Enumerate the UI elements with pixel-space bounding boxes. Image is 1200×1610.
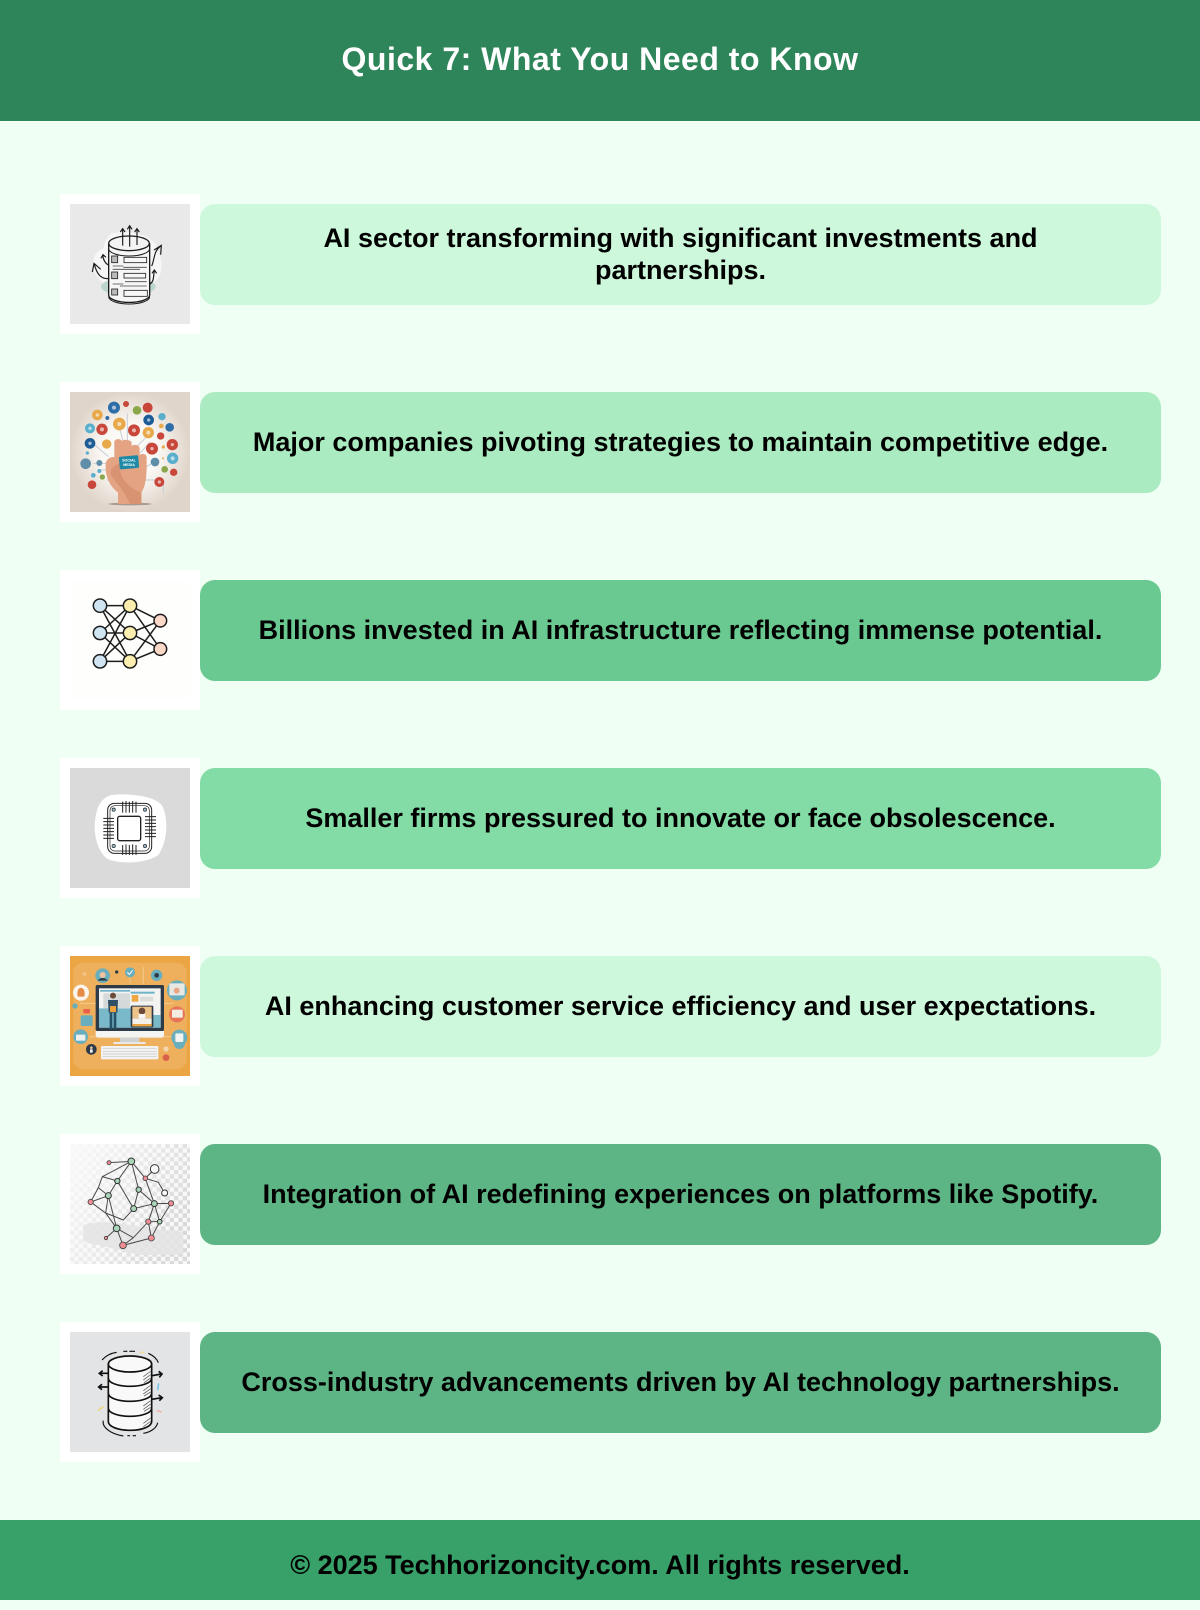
panel: point 3 — [60, 570, 1161, 710]
text card — [200, 768, 1161, 869]
text card: Integration of AI redefining experiences on platforms like Spotify. — [263, 1178, 1098, 1208]
icon: customer service screen — [60, 946, 200, 1086]
panel: point 6 — [60, 1134, 1161, 1274]
footer — [0, 1520, 1200, 1600]
text card: AI enhancing customer service efficiency and user expectations. — [265, 990, 1096, 1020]
text card: AI sector transforming with significant investments and partnerships. — [323, 222, 1038, 284]
text card — [200, 204, 1161, 305]
title: Quick 7: What You Need to Know — [342, 41, 858, 77]
panel: point 4 — [60, 758, 1161, 898]
text card: Smaller firms pressured to innovate or face obsolescence. — [305, 802, 1056, 832]
text card: Cross-industry advancements driven by AI technology partnerships. — [241, 1366, 1120, 1396]
text card — [200, 1144, 1161, 1245]
icon: hand holding social media tag — [60, 382, 200, 522]
text card — [200, 392, 1161, 493]
footer: © 2025 Techhorizoncity.com. All rights reserved. — [290, 1550, 910, 1580]
icon: neural network — [60, 570, 200, 710]
text card — [200, 1332, 1161, 1433]
panel: point 5 — [60, 946, 1161, 1086]
panel: point 1 — [60, 194, 1161, 334]
title — [0, 0, 1200, 121]
icon: database stack with arrows — [60, 1322, 200, 1462]
icon: microchip — [60, 758, 200, 898]
icon: network graph on checkerboard — [60, 1134, 200, 1274]
text card — [200, 580, 1161, 681]
panel: point 7 — [60, 1322, 1161, 1462]
icon: database cylinder with arrows — [60, 194, 200, 334]
icon: hand holding social media tag: SOCIAL — [122, 459, 137, 463]
text card: Billions invested in AI infrastructure reflecting immense potential. — [259, 614, 1102, 644]
icon: hand holding social media tag: MEDIA — [123, 463, 135, 467]
text card — [200, 956, 1161, 1057]
panel: point 2 — [60, 382, 1161, 522]
text card: Major companies pivoting strategies to maintain competitive edge. — [253, 426, 1108, 456]
